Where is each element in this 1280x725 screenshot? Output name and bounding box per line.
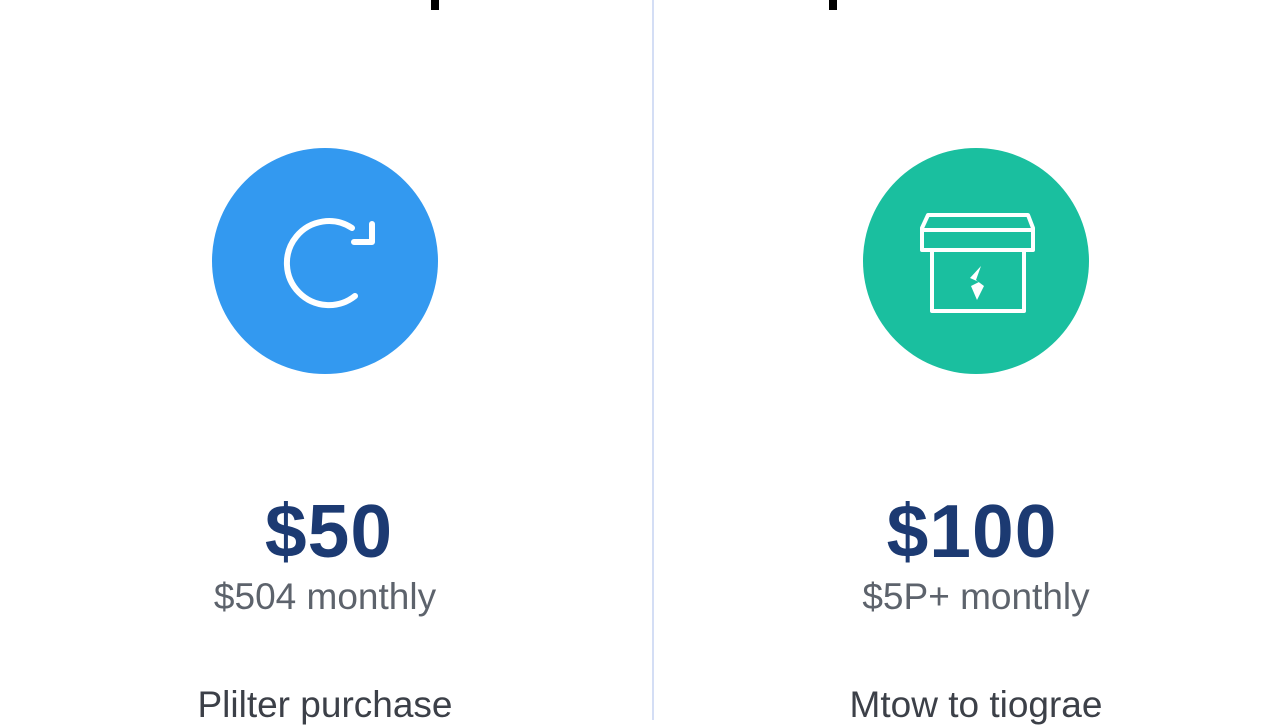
divider (652, 0, 654, 720)
label: Mtow to tiograe (850, 684, 1102, 725)
monthly text: $5P+ monthly (862, 576, 1090, 617)
panel: right (850, 148, 1102, 725)
title fragment right (829, 0, 837, 10)
title fragment left (431, 0, 439, 10)
price: $50 (265, 489, 393, 573)
monthly text: $504 monthly (214, 576, 436, 617)
panel: left (197, 148, 452, 725)
price: $100 (887, 489, 1057, 573)
label: Plilter purchase (197, 684, 452, 725)
icon: refresh circle (212, 148, 438, 374)
icon: store box circle (863, 148, 1089, 374)
